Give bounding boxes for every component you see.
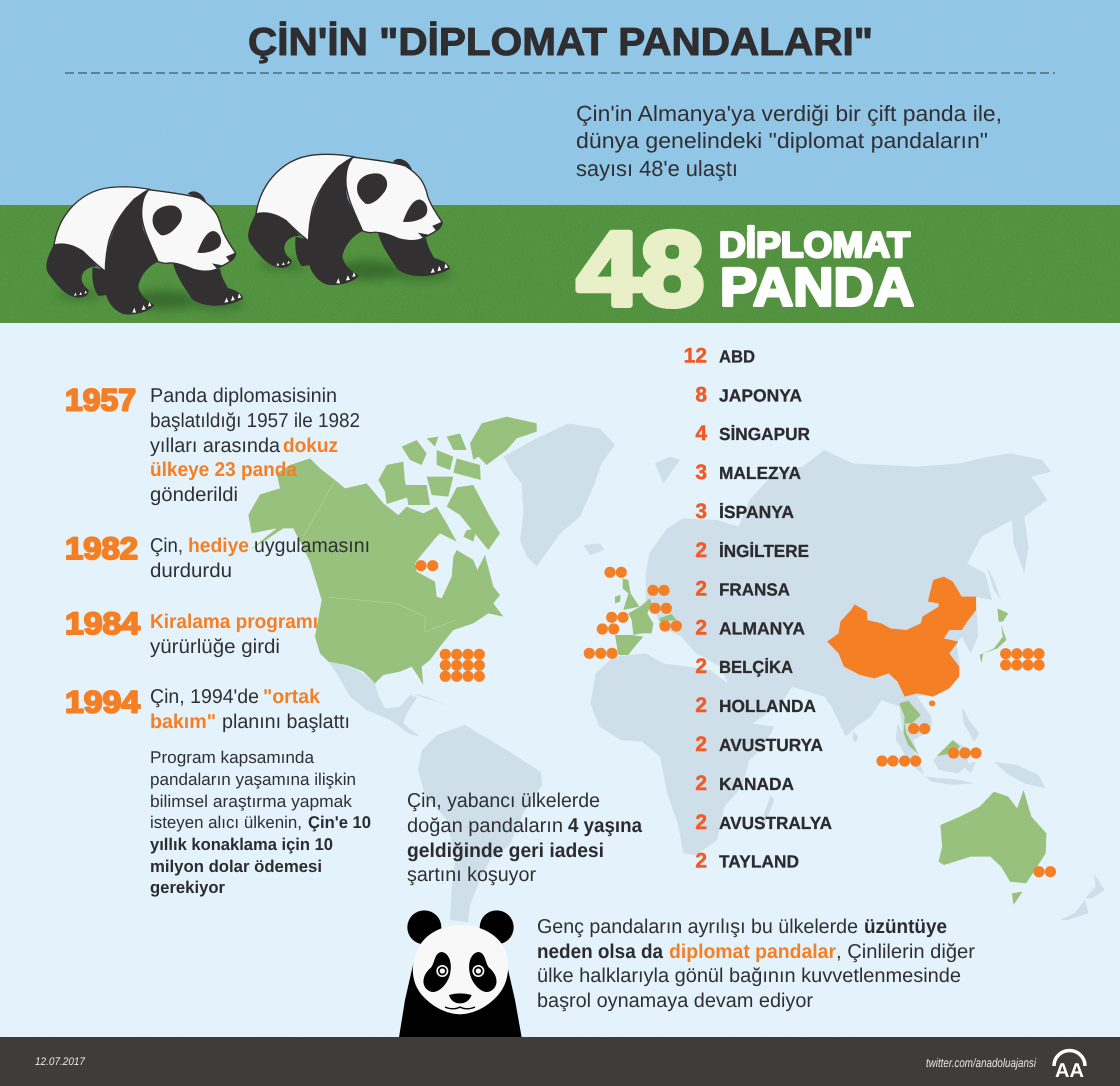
row: İspanya: İSPANYA (719, 502, 794, 522)
world map (248, 417, 1105, 922)
timeline: 1957: ülkeye 23 panda (150, 459, 298, 481)
illustration: panda portrait (399, 910, 522, 1037)
intro text (576, 101, 1002, 181)
row: Hollanda (695, 694, 816, 717)
row: İspanya: 3 (695, 500, 707, 523)
text: return condition: şartını koşuyor (407, 864, 536, 886)
panda count dots on map (415, 560, 1056, 877)
text: return condition: doğan pandaların (407, 815, 563, 837)
text: joint care programme details: isteyen alıcı ülkenin, (150, 813, 302, 832)
text: return condition: Çin, yabancı ülkelerde (407, 790, 600, 812)
panda: left (46, 187, 245, 315)
text: joint care programme details (150, 748, 371, 897)
timeline: 1984 (65, 606, 318, 658)
row: ABD (684, 344, 755, 368)
text: joint care programme details: gerekiyor (150, 878, 225, 897)
map: Australia (939, 790, 1046, 905)
map: grey continents, western hemisphere (328, 423, 680, 737)
title: ÇİN'İN "DİPLOMAT PANDALARI" (248, 21, 873, 64)
row: Belçika (695, 655, 793, 678)
intro text: Çin'in Almanya'ya verdiği bir çift panda ile, (576, 101, 1002, 126)
row: Tayland: TAYLAND (719, 852, 799, 872)
timeline: 1982: 1982 (65, 531, 138, 566)
row: Hollanda: HOLLANDA (719, 696, 816, 716)
title dashed rule (65, 72, 1055, 74)
sky band (0, 0, 1120, 205)
timeline: 1982 (65, 531, 370, 582)
row: Singapur (695, 422, 810, 445)
map: highlighted countries, east (827, 577, 1046, 905)
timeline: 1982: hediye (188, 535, 249, 557)
timeline: 1957: Panda diplomasisinin (150, 385, 337, 407)
dots: Europe (584, 567, 682, 659)
row: Fransa (695, 578, 790, 600)
map: Thailand (899, 701, 921, 755)
text: joint care programme details: Çin'e 10 (308, 813, 371, 832)
row: Singapur: 4 (695, 422, 707, 445)
closing text: başrol oynamaya devam ediyor (537, 990, 813, 1012)
row: Almanya: 2 (695, 616, 707, 640)
illustration: two walking pandas (46, 154, 452, 315)
row: Almanya: ALMANYA (719, 618, 805, 638)
timeline: 1957: dokuz (283, 435, 338, 457)
row: Malezya: 3 (695, 461, 707, 484)
row: İspanya (695, 500, 794, 523)
dots: Australia (1033, 866, 1056, 877)
timeline: 1994: "ortak (263, 686, 321, 708)
dots: Malaysia (948, 747, 982, 759)
dots: Singapore (876, 755, 921, 767)
row: Hollanda: 2 (695, 694, 707, 717)
row: Malezya (695, 461, 801, 484)
row: Avusturya: AVUSTURYA (719, 735, 823, 755)
closing text (537, 916, 975, 1012)
row: Almanya (695, 616, 805, 640)
row: Fransa: 2 (695, 578, 707, 600)
text: joint care programme details: Program kapsamında (150, 748, 315, 767)
country ranking list (684, 344, 832, 872)
row: Japonya: JAPONYA (719, 385, 802, 405)
text: return condition (407, 790, 643, 886)
dots: Thailand (908, 723, 930, 734)
row: İngiltere: İNGİLTERE (719, 541, 809, 561)
row: Tayland: 2 (695, 850, 707, 872)
dots: USA (440, 649, 485, 682)
footer twitter handle: twitter.com/anadoluajansi (926, 1056, 1037, 1070)
row: İngiltere: 2 (695, 539, 707, 562)
row: Tayland (695, 850, 799, 872)
map: Malaysia (937, 740, 960, 756)
intro text: sayısı 48'e ulaştı (576, 156, 738, 181)
closing text: Genç pandaların ayrılışı bu ülkelerde (537, 916, 858, 938)
map: North America in green (248, 417, 537, 685)
word: diplomat: DİPLOMAT (719, 224, 910, 265)
timeline: 1982: durdurdu (150, 560, 232, 582)
row: Japonya: 8 (695, 383, 707, 406)
dots: Japan (1000, 648, 1045, 671)
row: Avustralya: AVUSTRALYA (719, 813, 832, 833)
footer bar (0, 1037, 1120, 1086)
closing text: ülke halklarıyla gönül bağının kuvvetlenmesinde (537, 965, 961, 987)
timeline: 1957: gönderildi (150, 484, 238, 506)
word: panda: PANDA (720, 258, 914, 318)
row: Kanada: KANADA (719, 774, 794, 794)
row: Kanada (695, 772, 794, 795)
text: joint care programme details: yıllık konaklama için 10 (150, 835, 333, 854)
text: joint care programme details: milyon dolar ödemesi (150, 857, 322, 876)
logo: Anadolu Agency (1054, 1050, 1085, 1082)
closing text: diplomat pandalar (669, 941, 836, 963)
timeline: 1982: Çin, (150, 535, 183, 557)
dots: Canada (415, 560, 438, 571)
closing text: , Çinlilerin diğer (836, 941, 975, 963)
row: ABD: 12 (684, 344, 707, 368)
text: return condition: geldiğinde geri iadesi (407, 840, 604, 862)
panda: right (248, 154, 452, 285)
timeline: 1957: 1957 (65, 382, 136, 418)
timeline: 1994: bakım" (150, 711, 216, 733)
row: İngiltere (695, 539, 809, 562)
row: Fransa: FRANSA (719, 580, 790, 600)
headline number: 48 diplomat panda (577, 211, 914, 328)
number 48: 48 (577, 211, 704, 328)
timeline: 1994: 1994 (65, 684, 141, 720)
map: South America (418, 725, 542, 922)
timeline: 1982: uygulamasını (254, 535, 370, 557)
map: Western Europe in green (615, 578, 677, 655)
text: joint care programme details: pandaların yaşamına ilişkin (150, 770, 356, 789)
text: joint care programme details: bilimsel araştırma yapmak (150, 792, 353, 811)
timeline: 1984: Kiralama programı (150, 611, 318, 633)
row: Japonya (695, 383, 802, 406)
row: ABD: ABD (719, 346, 755, 366)
grass band (0, 205, 1120, 323)
row: Singapur: SİNGAPUR (719, 424, 810, 444)
timeline: 1984: yürürlüğe girdi (150, 636, 280, 658)
timeline: 1994: Çin, 1994'de (150, 686, 259, 708)
text: return condition: 4 yaşına (568, 815, 643, 837)
timeline: 1957: başlatıldığı 1957 ile 1982 (150, 410, 360, 432)
row: Avustralya: 2 (695, 811, 707, 834)
row: Kanada: 2 (695, 772, 707, 795)
intro text: dünya genelindeki "diplomat pandaların" (576, 128, 988, 153)
row: Belçika: BELÇİKA (719, 657, 793, 677)
map: grey continents, eastern hemisphere (590, 450, 1105, 920)
row: Malezya: MALEZYA (719, 463, 801, 483)
map: China in orange (827, 577, 976, 706)
map: Japan (980, 608, 1008, 663)
row: Belçika: 2 (695, 655, 707, 678)
timeline: 1957 (65, 382, 360, 506)
footer date: 12.07.2017 (35, 1056, 86, 1068)
timeline: 1994 (65, 684, 350, 733)
timeline: 1984: 1984 (65, 606, 141, 641)
closing text: üzüntüye (864, 916, 947, 938)
logo: Anadolu Agency: AA (1055, 1060, 1084, 1082)
timeline: 1994: planını başlattı (222, 711, 350, 733)
closing text: neden olsa da (537, 941, 664, 963)
row: Avusturya: 2 (695, 733, 707, 756)
timeline: 1957: yılları arasında (150, 435, 281, 457)
